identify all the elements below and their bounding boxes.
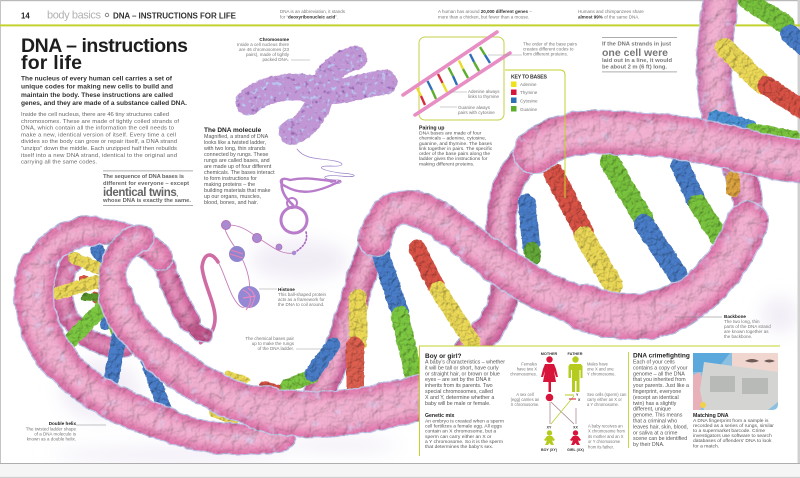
DNA molecule text: blood, bones, and hair.: [204, 200, 258, 206]
father figure: FATHER: [568, 352, 583, 356]
header fact: genes: more than a chicken, but fewer than a mouse.: [438, 14, 529, 19]
key to bases: Cytosine: [520, 98, 538, 104]
double helix: main front strand: [375, 207, 748, 317]
DNA crimefighting column: fingerprint, everyone: [633, 389, 681, 395]
DNA crimefighting column: contains a copy of your: [633, 365, 688, 371]
ladder note: adenine: Adenine always: [468, 89, 500, 94]
backbone label: The two long, thin: [724, 319, 760, 324]
callout: identical twins: different for everyone – except: [103, 181, 189, 187]
matching DNA caption: [693, 413, 774, 450]
boy or girl text: X and Y, determine whether a: [425, 395, 494, 401]
DNA crimefighting column: or saliva at a crime: [633, 430, 678, 436]
DNA crimefighting column: DNA crimefighting: [633, 352, 690, 360]
DNA molecule text: are made up of four different: [204, 164, 272, 170]
boy or girl text: [425, 353, 505, 450]
DNA molecule text: with two long, thin strands: [203, 146, 266, 152]
pairing up text: link together in pairs. The specific: [419, 146, 493, 152]
DNA molecule text: connected by rungs. These: [204, 152, 268, 158]
girl figure: [567, 426, 585, 452]
DNA crimefighting column: different, unique: [633, 407, 671, 413]
boy or girl text: A baby’s characteristics – whether: [425, 360, 505, 366]
matching DNA caption: recorded as a series of rungs, similar: [693, 423, 774, 429]
ladder note: guanine: [458, 105, 495, 115]
histone label: acts as a framework for: [278, 297, 325, 302]
header fact: abbreviation: [280, 9, 346, 19]
body paragraph: Inside the cell nucleus, there are 46 tiny structures called: [21, 112, 169, 118]
girl figure: GIRL (XX): [567, 448, 585, 452]
DNA molecule text: [203, 127, 275, 206]
DNA molecule text: to form instructions for: [204, 176, 257, 182]
ladder note: guanine: pairs with cytosine: [458, 110, 495, 115]
boy or girl text: cell fertilizes a female egg. All eggs: [425, 424, 502, 430]
girl figure: XX: [573, 426, 578, 430]
DNA crimefighting column: Each of your cells: [633, 360, 675, 366]
key to bases: Adenine: [520, 82, 537, 87]
double helix label: [26, 421, 77, 442]
matching DNA caption: to a supermarket barcode. Crime: [693, 428, 765, 434]
note: sperm: [587, 392, 627, 407]
chromosome label: Inside a cell nucleus there: [237, 42, 289, 47]
fact: one cell: If the DNA strands in just: [602, 42, 671, 48]
label: chemical bases pair up: of the DNA ladder.: [257, 346, 294, 351]
running header: DNA – INSTRUCTIONS FOR LIFE: [113, 11, 237, 20]
note: egg: [511, 392, 540, 407]
label: chemical bases pair up: [245, 336, 295, 351]
body paragraph: DNA, which contain all the information the cell needs to: [21, 126, 175, 132]
boy or girl text: An embryo is created when a sperm: [425, 418, 504, 424]
note: egg: (egg) carries an: [511, 397, 540, 402]
note: sperm: carry either an X or: [587, 397, 622, 402]
note: sperm: a Y chromosome.: [587, 402, 619, 407]
note: baby receives: or Y chromosome: [588, 439, 621, 444]
intro paragraph: maintain the body. These instructions are called: [21, 92, 173, 99]
double helix: upper right strand: [535, 132, 800, 163]
DNA crimefighting column: that you inherited from: [633, 377, 686, 383]
section name: body basics: [47, 10, 102, 22]
DNA crimefighting column: that a criminal who: [633, 418, 677, 424]
ladder note: order of base pairs: [523, 42, 578, 56]
backbone label: parts of the DNA strand: [724, 324, 771, 329]
fact: one cell: be about 2 m (6 ft) long.: [602, 64, 667, 70]
note: males: [587, 362, 616, 376]
double helix label: Double helix: [49, 421, 76, 426]
DNA molecule text: making proteins – the: [204, 182, 255, 188]
boy or girl text: Genetic mix: [425, 413, 455, 419]
inheritance arrows: [546, 393, 581, 424]
intro paragraph: unique codes for making new cells to build and: [21, 84, 173, 91]
boy or girl text: baby will be male or female.: [425, 401, 491, 407]
note: baby receives: A baby receives an: [588, 424, 623, 428]
ladder note: order of base pairs: creates different codes to: [523, 46, 574, 52]
boy or girl text: or straight hair, or brown or blue: [425, 371, 500, 377]
pairing up text: DNA bases are made of four: [419, 130, 482, 136]
ladder note: adenine: links to thymine: [468, 94, 500, 99]
soft shadows behind the helix: [50, 240, 800, 463]
matching DNA caption: databases of offenders’ DNA to look: [693, 438, 772, 444]
DNA crimefighting column: genome. This means: [633, 413, 683, 419]
boy or girl text: sperm can carry either an X or: [425, 434, 492, 440]
note: females: [510, 362, 537, 376]
histone balls: [222, 220, 296, 310]
pairing up text: ladder gives the instructions for: [419, 156, 488, 162]
label: chemical bases pair up: The chemical bases pair: [245, 336, 294, 341]
ladder note: order of base pairs: form different proteins.: [523, 52, 568, 56]
histone label: This ball-shaped protein: [278, 292, 327, 297]
boy or girl text: contain an X chromosome, but a: [425, 429, 496, 435]
note: females: have two X: [517, 366, 537, 372]
note: males: Males have: [587, 362, 609, 366]
header fact: genes: [438, 9, 532, 19]
key to bases: Guanine: [520, 107, 538, 112]
backbone label: the backbone.: [724, 334, 752, 339]
body paragraph: itself into a new DNA strand, identical to the original and: [21, 153, 177, 159]
DNA molecule text: chemicals. The bases interact: [204, 170, 275, 176]
body paragraph: “unzips” down the middle. Each unzipped half then rebuilds: [21, 146, 177, 152]
matching DNA caption: investigators use software to search: [693, 433, 772, 439]
label: chemical bases pair up: up to make the rungs: [252, 341, 295, 346]
header fact: chimpanzees: Humans and chimpanzees share: [578, 9, 644, 14]
DNA molecule text: rungs are called bases, and: [204, 158, 270, 164]
chromatin thread: DNA coiling from chromosome: [200, 149, 354, 343]
DNA molecule text: looks like a twisted ladder,: [204, 140, 266, 146]
backbone label: [724, 314, 771, 339]
header fact: genes: A human has around 20,000 different genes –: [438, 9, 532, 14]
DNA molecule text: up our organs, muscles,: [204, 194, 261, 200]
intro paragraph: genes, and they are made of a substance called DNA.: [21, 100, 187, 107]
backbone label: Backbone: [724, 314, 746, 319]
note: egg: A sex cell: [516, 392, 534, 397]
body paragraph: make a new, identical version of itself. Every time a cell: [21, 132, 176, 138]
double helix: back strands: [62, 0, 748, 392]
chromosome label: [237, 37, 290, 62]
chromosome label: are 46 chromosomes (23: [239, 47, 289, 52]
DNA crimefighting column: scene can be identified: [633, 436, 687, 442]
callout: identical twins: The sequence of DNA bases is: [103, 174, 184, 180]
note: sperm: Sex cells (sperm) can: [587, 392, 627, 397]
note: females: Females: [521, 362, 537, 366]
note: baby receives: its mother and an X: [588, 434, 624, 439]
boy or girl text: Boy or girl?: [425, 353, 462, 360]
key to bases: [505, 70, 565, 198]
DNA ladder diagram: [403, 32, 522, 120]
title: DNA – instructions: [21, 35, 188, 57]
boy figure: [541, 426, 558, 452]
matching DNA caption: for a match.: [693, 444, 719, 450]
chromosome label: pairs), made of tightly: [246, 52, 290, 57]
double helix label: of a DNA molecule is: [34, 432, 77, 436]
body paragraph: [21, 112, 179, 166]
inheritance arrows: Y: [576, 393, 579, 397]
inheritance arrows: X: [578, 398, 581, 402]
chromosome label: packed DNA.: [262, 57, 289, 62]
boy or girl text: a Y chromosome. So it is the sperm: [425, 439, 503, 445]
boy or girl text: that determines the baby’s sex.: [425, 444, 493, 450]
fact: one cell: one cell were: [602, 47, 668, 59]
boy or girl text: it will be tall or short, have curly: [425, 365, 499, 371]
DNA crimefighting column: leaves hair, skin, blood,: [633, 424, 688, 430]
header fact: chimpanzees: almost 99% of the same DNA.: [578, 14, 640, 19]
callout: identical twins: whose DNA is exactly the same.: [102, 198, 191, 204]
header fact: abbreviation: for “deoxyribonucleic acid”.: [280, 14, 338, 19]
note: baby receives: [588, 424, 625, 449]
fact: one cell: laid out in a line, it would: [602, 58, 672, 64]
note: baby receives: X chromosome from: [588, 429, 625, 434]
body paragraph: chromosomes. These are made of tightly coiled strands of: [21, 119, 179, 125]
title: [21, 35, 188, 74]
header fact: chimpanzees: [578, 9, 644, 19]
ladder note: adenine: [468, 89, 500, 99]
bottom information panel: [419, 346, 781, 456]
title: for life: [21, 52, 82, 74]
key to bases: Thymine: [520, 90, 538, 95]
mother figure: [541, 352, 558, 392]
boy figure: XY: [547, 426, 552, 430]
note: baby receives: from its father.: [588, 444, 614, 449]
matching DNA caption: Matching DNA: [693, 413, 729, 419]
ladder note: guanine: Guanine always: [458, 105, 491, 110]
DNA molecule text: Magnified, a strand of DNA: [204, 134, 269, 140]
intro paragraph: [21, 76, 187, 107]
body paragraph: carrying all the same codes.: [21, 160, 97, 166]
ladder note: order of base pairs: The order of the base pairs: [523, 42, 578, 46]
callout: identical twins: identical twins,: [103, 187, 178, 199]
header separator dot: [105, 13, 109, 17]
pairing up text: making different proteins.: [419, 161, 474, 167]
DNA crimefighting column: by their DNA.: [633, 442, 664, 448]
DNA molecule text: building materials that make: [204, 188, 271, 194]
photo: DNA fingerprint film: [693, 353, 778, 410]
chromosome label: Chromosome: [259, 37, 289, 42]
histone label: Histone: [278, 287, 295, 292]
intro paragraph: The nucleus of every human cell carries a set of: [21, 76, 173, 82]
DNA crimefighting column: genome – all the DNA: [633, 371, 685, 377]
double helix label: known as a double helix.: [27, 436, 76, 442]
pairing up text: [419, 126, 493, 167]
boy or girl text: inherits from its parents. Two: [425, 383, 493, 389]
double helix: inner front strand: [113, 238, 425, 414]
double helix label: The twisted ladder shape: [26, 426, 76, 432]
note: males: one X and one: [587, 366, 614, 372]
father figure: [568, 352, 583, 392]
header fact: abbreviation: DNA is an abbreviation, it stands: [280, 9, 346, 14]
DNA molecule text: The DNA molecule: [204, 127, 262, 134]
DNA crimefighting column: (except an identical: [633, 395, 679, 401]
double helix: outer loop strand: [34, 231, 280, 439]
pairing up text: guanine, and thymine. The bases: [419, 141, 492, 147]
fact: one cell: [602, 37, 677, 72]
chromosome illustration: [249, 58, 385, 132]
DNA crimefighting column: twin) has a slightly: [633, 401, 677, 407]
DNA crimefighting column: your parents. Just like a: [633, 383, 689, 389]
DNA crimefighting column: [628, 352, 690, 448]
callout: identical twins: [102, 170, 193, 206]
mother figure: MOTHER: [541, 352, 557, 356]
pairing up text: order of the base pairs along the: [419, 151, 490, 157]
note: egg: X chromosome.: [511, 402, 539, 407]
page number: 14: [21, 12, 30, 20]
boy or girl text: special chromosomes, called: [425, 389, 493, 395]
backbone label: are known together as: [724, 329, 769, 334]
pairing up text: chemicals – adenine, cytosine,: [419, 136, 486, 142]
note: males: Y chromosome.: [587, 372, 616, 376]
key to bases: KEY TO BASES: [511, 74, 548, 80]
note: females: chromosomes.: [510, 372, 537, 376]
histone label: the DNA to coil around.: [278, 302, 324, 307]
boy figure: BOY (XY): [541, 448, 558, 452]
histone label: [278, 287, 327, 307]
boy or girl text: eyes – are set by the DNA it: [425, 377, 491, 383]
matching DNA caption: A DNA fingerprint from a sample is: [693, 418, 769, 424]
pairing up text: Pairing up: [419, 126, 444, 132]
body paragraph: divides so the body can grow or repair itself, a DNA strand: [21, 139, 177, 145]
